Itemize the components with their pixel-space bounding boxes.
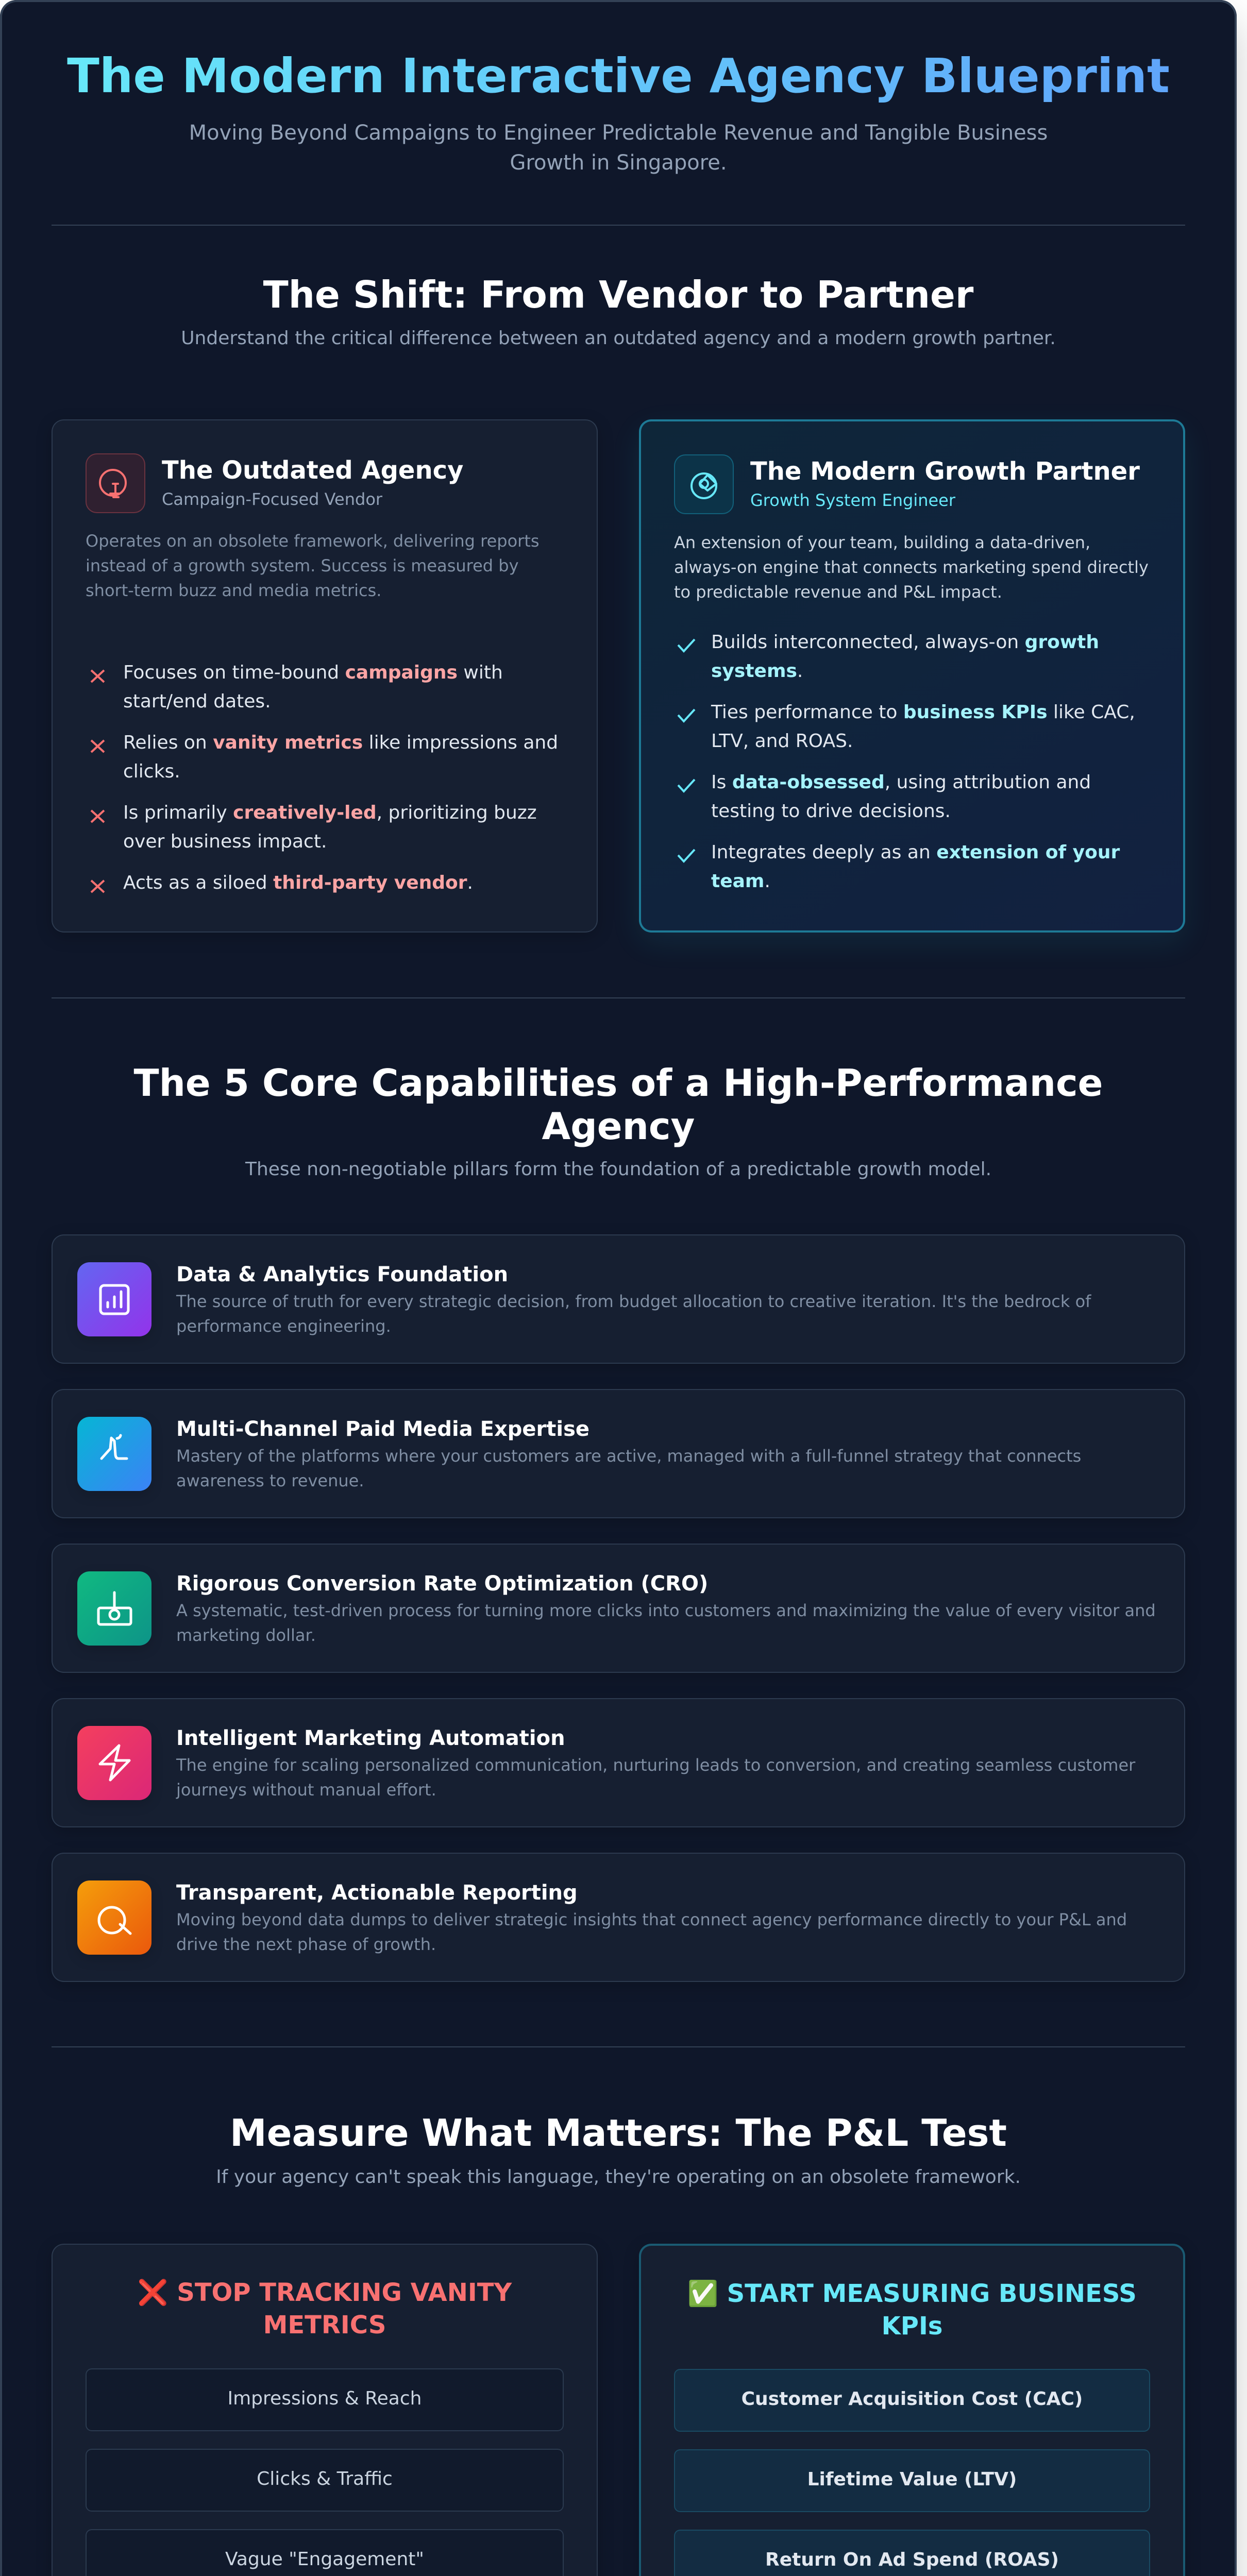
capability: data and analytics bbox=[52, 1234, 1185, 1364]
kpi: roas: Return On Ad Spend (ROAS) bbox=[765, 2549, 1059, 2570]
capability description: A systematic, test-driven process for turning more clicks into customers and maximizing the value of every visitor and bbox=[176, 1601, 1156, 1620]
outdated agency description: short-term buzz and media metrics. bbox=[86, 581, 381, 600]
capability title: Multi-Channel Paid Media Expertise bbox=[176, 1417, 589, 1441]
capability title: Intelligent Marketing Automation bbox=[176, 1726, 565, 1750]
outdated agency description: instead of a growth system. Success is measured by bbox=[86, 556, 519, 575]
metric: impressions: Impressions & Reach bbox=[228, 2388, 422, 2409]
list item: business KPIs bbox=[677, 702, 1135, 752]
modern partner description bbox=[674, 533, 1149, 602]
list item: growth systems bbox=[677, 632, 1099, 682]
panel: start measuring business kpis bbox=[639, 2244, 1185, 2576]
modern partner subtitle: Growth System Engineer bbox=[750, 490, 955, 510]
capability title: Rigorous Conversion Rate Optimization (CRO) bbox=[176, 1572, 708, 1596]
icon: lightning bolt bbox=[77, 1726, 151, 1800]
heading: core capabilities: The 5 Core Capabilities of a High-Performance bbox=[133, 1061, 1103, 1105]
modern partner description: An extension of your team, building a data-driven, bbox=[674, 533, 1090, 552]
capability: automation bbox=[52, 1698, 1185, 1827]
outdated agency description bbox=[86, 531, 540, 600]
capability: paid media bbox=[52, 1389, 1185, 1518]
outdated agency title: The Outdated Agency bbox=[162, 456, 463, 485]
capability description: The engine for scaling personalized communication, nurturing leads to conversion, and creating seamless customer bbox=[176, 1755, 1135, 1775]
heading: the shift: The Shift: From Vendor to Partner bbox=[263, 273, 973, 316]
modern partner title: The Modern Growth Partner bbox=[750, 457, 1140, 486]
kpi: ltv bbox=[674, 2449, 1150, 2512]
metric: engagement bbox=[86, 2529, 564, 2576]
list item: business KPIs: LTV, and ROAS. bbox=[711, 731, 853, 752]
panel heading bbox=[138, 2278, 512, 2340]
outdated agency subtitle: Campaign-Focused Vendor bbox=[162, 489, 382, 509]
subheading: core capabilities: These non-negotiable pillars form the foundation of a predictable growth model. bbox=[245, 1159, 991, 1180]
subtitle: Moving Beyond Campaigns to Engineer Predictable Revenue and Tangible Business bbox=[189, 121, 1048, 145]
capability description: Moving beyond data dumps to deliver strategic insights that connect agency performance directly to your P&L and bbox=[176, 1910, 1127, 1929]
list item: creatively-led: Is primarily creatively-led, prioritizing buzz bbox=[123, 802, 537, 823]
panel: the outdated agency bbox=[52, 419, 598, 933]
heading: measure what matters: Measure What Matters: The P&L Test bbox=[230, 2111, 1007, 2155]
metric: clicks: Clicks & Traffic bbox=[257, 2468, 393, 2489]
list item: creatively-led bbox=[91, 802, 537, 852]
list item: extension of your team bbox=[677, 842, 1120, 892]
metric: clicks bbox=[86, 2449, 564, 2512]
list item: business KPIs: Ties performance to business KPIs like CAC, bbox=[711, 702, 1135, 723]
capability description: performance engineering. bbox=[176, 1316, 391, 1336]
list item: campaigns bbox=[91, 662, 503, 712]
kpi: ltv: Lifetime Value (LTV) bbox=[807, 2469, 1017, 2490]
icon: outdated bulb bbox=[86, 453, 145, 513]
capability title: Data & Analytics Foundation bbox=[176, 1263, 508, 1286]
capability description bbox=[176, 1292, 1091, 1336]
modern partner description: always-on engine that connects marketing spend directly bbox=[674, 557, 1149, 577]
subtitle bbox=[189, 121, 1048, 175]
list item: creatively-led: over business impact. bbox=[123, 831, 327, 852]
subheading: the shift: Understand the critical difference between an outdated agency and a modern growth partner. bbox=[181, 328, 1056, 349]
capability description bbox=[176, 1910, 1127, 1954]
capability description: journeys without manual effort. bbox=[176, 1780, 436, 1800]
metric: impressions bbox=[86, 2368, 564, 2431]
heading: core capabilities bbox=[133, 1061, 1103, 1148]
list item: data-obsessed: Is data-obsessed, using attribution and bbox=[711, 772, 1091, 793]
list item: growth systems: systems. bbox=[711, 660, 803, 682]
capability description bbox=[176, 1755, 1136, 1800]
list item: extension of your team: team. bbox=[711, 871, 770, 892]
list item: extension of your team: Integrates deeply as an extension of your bbox=[711, 842, 1120, 863]
icon: channels bbox=[77, 1417, 151, 1491]
capability description bbox=[176, 1601, 1156, 1645]
list item: data-obsessed: testing to drive decisions. bbox=[711, 801, 951, 822]
capability description: awareness to revenue. bbox=[176, 1471, 364, 1490]
list item: vanity metrics bbox=[91, 732, 558, 782]
heading: core capabilities: Agency bbox=[542, 1105, 695, 1148]
capability description bbox=[176, 1446, 1081, 1490]
capability description: The source of truth for every strategic decision, from budget allocation to creative iteration. It's the bedrock of bbox=[176, 1292, 1091, 1311]
outdated agency description: Operates on an obsolete framework, delivering reports bbox=[86, 531, 540, 551]
panel: stop tracking vanity metrics bbox=[52, 2244, 598, 2576]
icon: modern growth target bbox=[674, 454, 734, 514]
list item: vanity metrics: clicks. bbox=[123, 761, 180, 782]
icon: conversion bbox=[77, 1571, 151, 1646]
capability description: drive the next phase of growth. bbox=[176, 1935, 436, 1954]
panel heading: ❌ STOP TRACKING VANITY bbox=[138, 2278, 512, 2307]
capability: reporting bbox=[52, 1853, 1185, 1982]
panel heading bbox=[687, 2279, 1137, 2341]
panel: the modern growth partner bbox=[639, 419, 1185, 933]
capability description: marketing dollar. bbox=[176, 1625, 316, 1645]
list item: vanity metrics: Relies on vanity metrics like impressions and bbox=[123, 732, 558, 753]
metric: engagement: Vague "Engagement" bbox=[225, 2549, 424, 2570]
title: The Modern Interactive Agency Blueprint bbox=[67, 48, 1170, 104]
list item: third-party vendor: Acts as a siloed third-party vendor. bbox=[123, 872, 473, 893]
capability description: Mastery of the platforms where your customers are active, managed with a full-funnel strategy that connects bbox=[176, 1446, 1081, 1466]
capability title: Transparent, Actionable Reporting bbox=[176, 1881, 578, 1905]
panel heading: KPIs bbox=[882, 2312, 942, 2341]
panel heading: ✅ START MEASURING BUSINESS bbox=[687, 2279, 1137, 2308]
list item: campaigns: start/end dates. bbox=[123, 691, 271, 712]
modern partner description: to predictable revenue and P&L impact. bbox=[674, 582, 1002, 602]
list item: data-obsessed bbox=[677, 772, 1091, 822]
kpi: cac bbox=[674, 2369, 1150, 2432]
capability: cro bbox=[52, 1544, 1185, 1673]
icon: bar chart bbox=[77, 1262, 151, 1336]
list item: growth systems: Builds interconnected, always-on growth bbox=[711, 632, 1099, 653]
subheading: measure what matters: If your agency can't speak this language, they're operating on an obsolete framework. bbox=[216, 2166, 1021, 2188]
icon: magnifier bbox=[77, 1880, 151, 1955]
panel heading: METRICS bbox=[263, 2311, 386, 2340]
list item: campaigns: Focuses on time-bound campaigns with bbox=[123, 662, 503, 683]
kpi: roas bbox=[674, 2530, 1150, 2576]
kpi: cac: Customer Acquisition Cost (CAC) bbox=[742, 2388, 1083, 2410]
subtitle: Growth in Singapore. bbox=[510, 151, 727, 175]
